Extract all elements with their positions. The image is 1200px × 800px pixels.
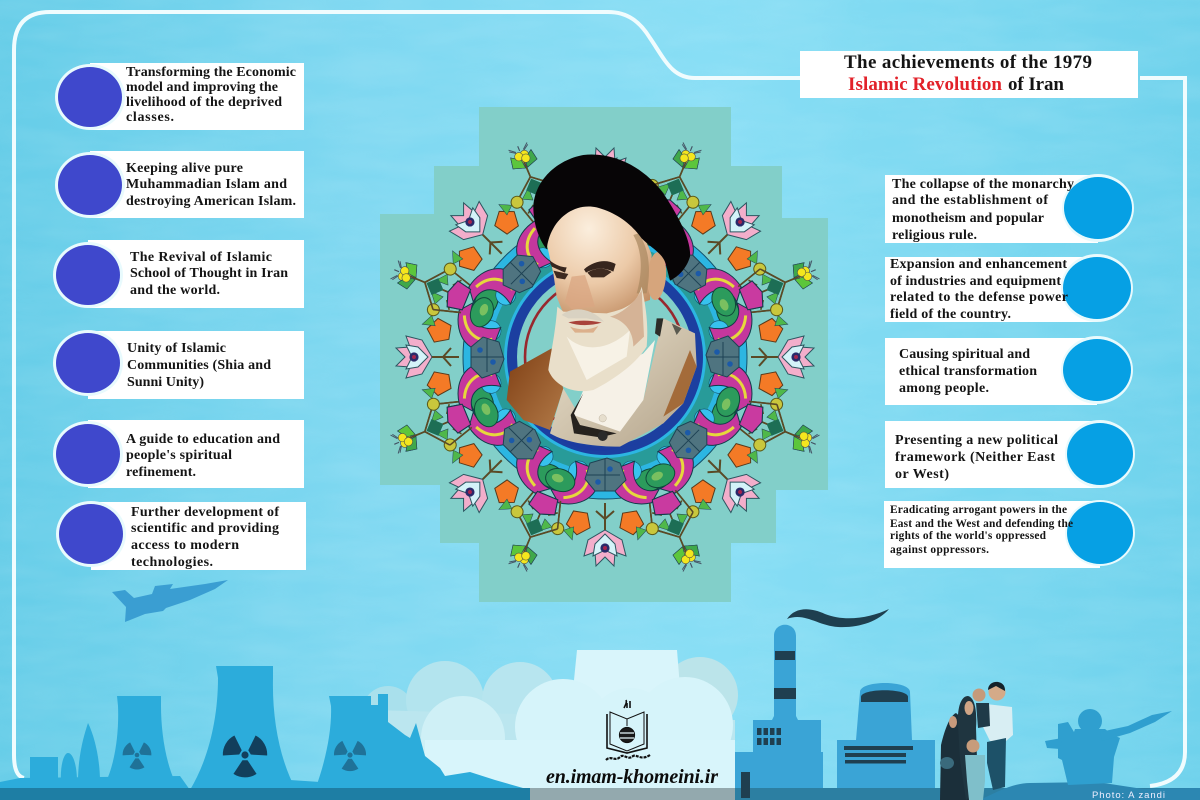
item: right 4: Presenting a new political [895, 433, 1058, 448]
item: right 1 [885, 174, 1134, 243]
title box: of Iran [1008, 74, 1064, 95]
panel: stepped teal background behind ornament [380, 107, 828, 602]
item: right 4: framework (Neither East [895, 450, 1055, 465]
portrait [507, 155, 697, 451]
ornament: floral mandala [381, 133, 829, 581]
toddler on arm [972, 688, 986, 702]
item: left 1: model and improving the [126, 80, 278, 95]
item: left 3: and the world. [130, 283, 220, 298]
item: right 2: Expansion and enhancement [890, 257, 1067, 272]
item: right 5: rights of the world's oppressed [890, 530, 1047, 542]
item: left 4: Communities (Shia and [127, 358, 271, 373]
item: right 2: field of the country. [890, 307, 1011, 322]
child in front [966, 740, 980, 752]
logo [606, 700, 650, 760]
item: right 3: among people. [899, 381, 989, 396]
item: left 6: technologies. [131, 555, 213, 570]
item: right 3: ethical transformation [899, 364, 1037, 379]
website address: en.imam-khomeini.ir [546, 766, 718, 788]
white tunic [573, 340, 655, 432]
item: left 5: refinement. [126, 465, 196, 480]
beard [548, 287, 647, 391]
soldier with launcher [980, 709, 1200, 800]
item: right 2 [885, 254, 1133, 322]
item: right 1: and the establishment of [892, 193, 1048, 208]
nose and mouth [565, 275, 595, 309]
girl [940, 713, 970, 800]
item: left 2 [55, 151, 304, 218]
item: left 3 [53, 240, 304, 308]
item: left 2: Keeping alive pure [126, 161, 243, 176]
shawl [550, 318, 697, 447]
reactor building [856, 683, 912, 740]
factory with chimney [735, 609, 935, 798]
bottom band [0, 788, 1200, 800]
item: left 1 [55, 63, 304, 130]
item: left 1: classes. [126, 110, 174, 125]
item: right 1: monotheism and popular [892, 211, 1044, 226]
robe [507, 348, 563, 430]
icon: radiation symbol 1 [121, 741, 153, 769]
item: left 4 [53, 330, 304, 399]
turban [533, 155, 690, 281]
woman [958, 696, 978, 800]
cooling tower 3 and building [315, 694, 530, 790]
skyline with nuclear towers [0, 666, 530, 790]
item: left 2: destroying American Islam. [126, 194, 296, 209]
item: right 1: religious rule. [892, 228, 977, 243]
item: left 3: School of Thought in Iran [130, 266, 288, 281]
cooling tower 2 [190, 666, 296, 790]
item: left 6: Further development of [131, 505, 279, 520]
item: left 4: Sunni Unity) [127, 375, 204, 390]
blue shadow under chest [550, 432, 640, 451]
clouds [360, 650, 738, 790]
family group [940, 682, 1013, 800]
item: right 3 [885, 336, 1133, 405]
item: right 5: Eradicating arrogant powers in the [890, 504, 1067, 516]
bag [940, 757, 954, 769]
item: right 3: Causing spiritual and [899, 347, 1030, 362]
item: right 4 [885, 420, 1135, 488]
item: right 5 [884, 500, 1135, 568]
icon: radiation symbol 2 [220, 734, 270, 777]
item: left 2: Muhammadian Islam and [126, 177, 287, 192]
item: left 5: people's spiritual [126, 448, 232, 463]
title box: The achievements of the 1979 [844, 52, 1092, 73]
item: right 2: of industries and equipment [890, 274, 1061, 289]
item: left 1: livelihood of the deprived [126, 95, 282, 110]
brows and eyes [549, 260, 616, 273]
icon: radiation symbol 3 [332, 740, 368, 771]
item: left 5 [53, 420, 304, 488]
item: left 6: scientific and providing [131, 521, 279, 536]
item: right 1: The collapse of the monarchy [892, 177, 1074, 192]
item: left 5: A guide to education and [126, 432, 280, 447]
cooling tower 1 [106, 696, 175, 782]
man [982, 704, 1013, 741]
item: left 1: Transforming the Economic [126, 65, 296, 80]
airplane silhouette [112, 580, 228, 622]
item: right 5: against oppressors. [890, 544, 989, 556]
item: left 6 [56, 501, 306, 570]
title box: Islamic Revolution [848, 74, 1002, 95]
item: left 4: Unity of Islamic [127, 341, 226, 356]
item: left 6: access to modern [131, 538, 239, 553]
item: right 4: or West) [895, 467, 949, 482]
item: left 3: The Revival of Islamic [130, 250, 272, 265]
title box [800, 51, 1138, 98]
item: right 5: East and the West and defending the [890, 518, 1073, 530]
item: right 2: related to the defense power [890, 290, 1068, 305]
face [547, 200, 652, 317]
smoke [787, 609, 889, 627]
